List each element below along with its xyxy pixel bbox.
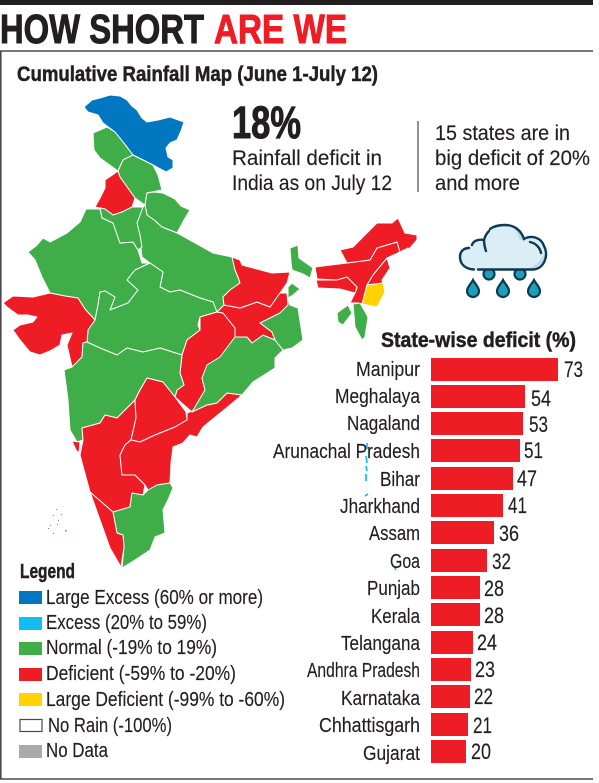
- legend title: Legend: [20, 561, 75, 583]
- bar: Arunachal Pradesh: Arunachal Pradesh: [273, 440, 420, 463]
- state: Manipur: [362, 283, 385, 307]
- legend item: excess: Excess (20% to 59%): [46, 612, 207, 634]
- bar: Gujarat: Gujarat: [363, 742, 420, 765]
- islands: Andaman and Nicobar: [365, 443, 396, 570]
- bar: Gujarat: [363, 739, 491, 765]
- bar: Jharkhand: Jharkhand: [340, 495, 420, 518]
- state: Haryana: [100, 207, 143, 250]
- bar: Chhattisgarh: [319, 713, 492, 738]
- bar: Karnataka: [341, 684, 493, 710]
- bar: Kerala: [371, 603, 504, 628]
- bar: Arunachal Pradesh: [273, 438, 543, 463]
- state: Rajasthan: [28, 209, 150, 320]
- stat: 18% rainfall deficit: [232, 97, 392, 195]
- title: HOW SHORT: [0, 6, 204, 52]
- state: Tamil Nadu: [113, 483, 173, 568]
- bar: Kerala: Kerala: [371, 605, 420, 628]
- state: Madhya Pradesh: [87, 263, 217, 355]
- bar: Karnataka: 22: [474, 684, 493, 709]
- state: Maharashtra: [64, 342, 184, 442]
- state: Odisha: [192, 335, 283, 412]
- bar: Kerala: 28: [484, 603, 504, 628]
- state: Mizoram: [353, 303, 368, 340]
- legend item: large excess: Large Excess (60% or more): [46, 587, 263, 609]
- bar: Goa: 32: [492, 549, 511, 574]
- bar: Meghalaya: 54: [531, 386, 551, 411]
- bar: Assam: 36: [499, 521, 519, 546]
- state: Karnataka: [80, 400, 145, 512]
- bar: Punjab: [367, 576, 504, 601]
- state: Punjab: [95, 171, 135, 215]
- bar: Arunachal Pradesh: 51: [524, 438, 543, 463]
- legend item: no rain: No Rain (-100%): [48, 715, 172, 737]
- bar: Chhattisgarh: Chhattisgarh: [319, 714, 420, 737]
- state: Jammu and Kashmir: [84, 95, 184, 172]
- state: Bihar: [223, 257, 290, 308]
- legend item: large deficient: Large Deficient (-99% to -60%): [46, 689, 285, 711]
- bar: Punjab: 28: [484, 576, 504, 601]
- bar: Nagaland: Nagaland: [347, 412, 420, 435]
- subtitle: map heading: Cumulative Rainfall Map (June 1-July 12): [17, 63, 378, 86]
- bar: Chhattisgarh: 21: [473, 713, 492, 738]
- bar: Bihar: [380, 466, 537, 491]
- state: Ladakh-side green region: [93, 127, 133, 171]
- legend item: normal: Normal (-19% to 19%): [46, 637, 217, 659]
- legend: [19, 561, 285, 762]
- bar: Nagaland: 53: [529, 412, 548, 437]
- state: Jharkhand: [217, 293, 288, 343]
- map of India: [3, 95, 417, 570]
- state: Arunachal Pradesh: [340, 218, 417, 263]
- bar: Punjab: Punjab: [367, 577, 420, 600]
- bar: Telangana: [341, 630, 497, 655]
- bar: Meghalaya: [335, 385, 551, 411]
- bar: Bihar: 47: [517, 466, 537, 491]
- bar chart: state-wise deficit: [273, 357, 583, 765]
- bar: Nagaland: [347, 412, 548, 437]
- state: Gujarat: [3, 293, 95, 367]
- state: Kerala: [90, 492, 124, 567]
- bar: Jharkhand: [340, 493, 527, 518]
- stat: 18% rainfall deficit: India as on July 12: [232, 172, 392, 195]
- state: Assam: [315, 242, 400, 304]
- bar: Gujarat: 20: [471, 739, 491, 764]
- state: Goa: [72, 441, 80, 453]
- state: Himachal Pradesh: [118, 155, 162, 205]
- stat: 15 states in big deficit: and more: [435, 172, 520, 195]
- bar: Telangana: Telangana: [341, 632, 420, 655]
- bar: Meghalaya: Meghalaya: [335, 385, 420, 408]
- state: Meghalaya: [316, 277, 357, 293]
- bar: Telangana: 24: [477, 630, 497, 655]
- legend item: no data: [19, 740, 109, 762]
- state: Tripura: [337, 305, 352, 325]
- bar: Andhra Pradesh: Andhra Pradesh: [307, 659, 420, 682]
- stat: 15 states in big deficit: 15 states are in: [435, 122, 570, 145]
- bar: Goa: [390, 549, 511, 574]
- state: Uttarakhand: [145, 192, 190, 233]
- state: Telangana: [131, 378, 187, 442]
- bar: Manipur: [356, 357, 583, 382]
- bar: Goa: Goa: [390, 550, 420, 573]
- bar chart heading: State-wise deficit (%): [381, 329, 576, 352]
- bar: Assam: Assam: [369, 522, 420, 545]
- state: Uttar Pradesh: [137, 205, 240, 312]
- stat: 18% rainfall deficit: 18%: [232, 97, 301, 148]
- bar: Karnataka: Karnataka: [341, 687, 421, 710]
- stat: 18% rainfall deficit: Rainfall deficit in: [232, 147, 382, 170]
- title: ARE WE: [214, 6, 347, 52]
- bar: Jharkhand: 41: [508, 493, 527, 518]
- stat: 15 states in big deficit: big deficit of 20%: [435, 147, 590, 170]
- state: Chhattisgarh: [175, 312, 235, 412]
- state: Nagaland: [367, 258, 390, 285]
- stat: 15 states in big deficit: [435, 122, 590, 195]
- bar: Manipur: Manipur: [356, 358, 420, 381]
- legend item: deficient: Deficient (-59% to -20%): [46, 663, 236, 685]
- legend item: no data: No Data: [46, 740, 109, 762]
- state: Andhra Pradesh: [120, 393, 242, 490]
- bar: Assam: [369, 521, 519, 546]
- state: West Bengal: [260, 245, 313, 350]
- bar: Andhra Pradesh: 23: [475, 657, 495, 682]
- bar: Manipur: 73: [564, 357, 583, 382]
- bar: Bihar: Bihar: [380, 468, 420, 491]
- islands: Lakshadweep: [48, 509, 66, 534]
- icon: rain cloud: [460, 225, 546, 297]
